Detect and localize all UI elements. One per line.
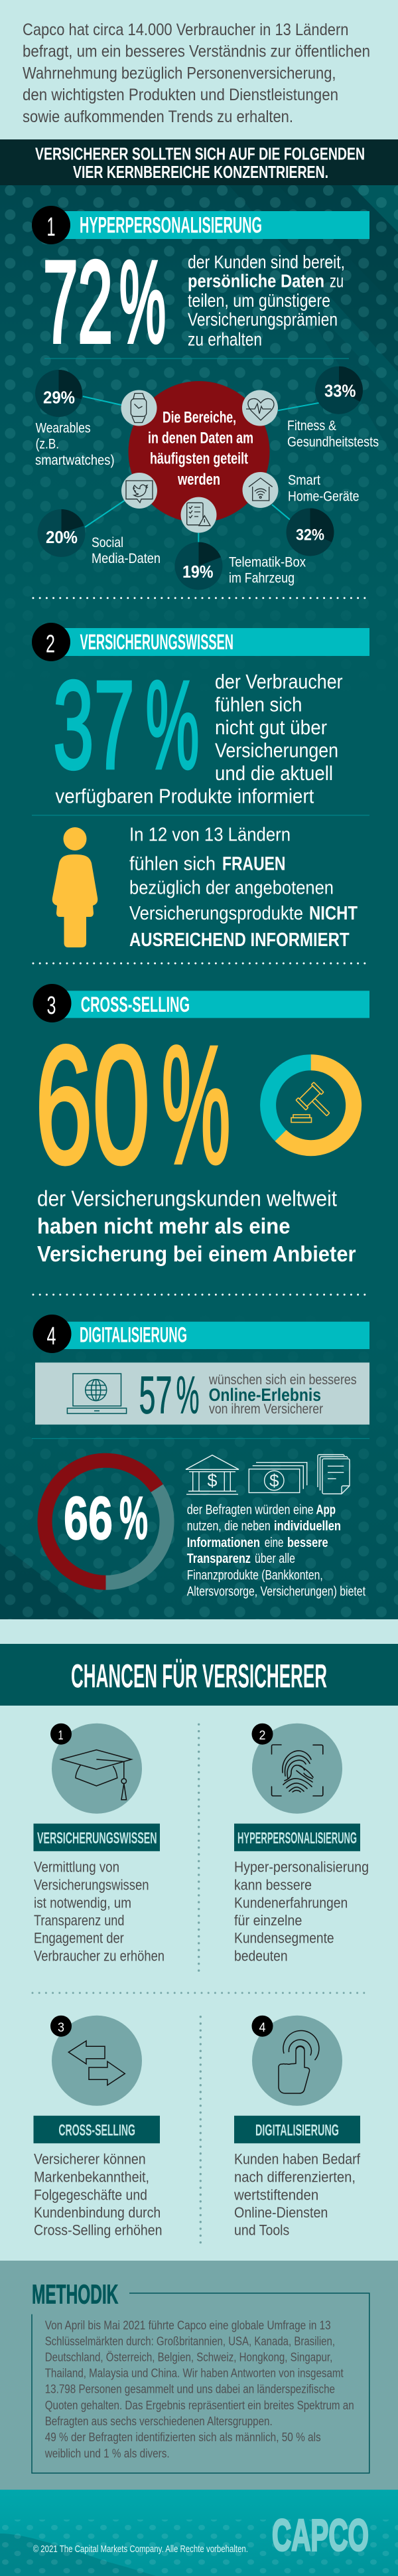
stat text: 37 percent: nicht gut über [215,716,327,739]
label: wearables [35,421,115,468]
ring chart: 66 percent: % [119,1485,148,1552]
text: women not sufficiently informed: fühlen sich [129,854,216,875]
icon: woman [52,827,98,947]
panel: opportunity 2: Kundensegmente [234,1930,334,1947]
label: smart home: Home-Geräte [288,489,360,505]
section 4 heading: DIGITALISIERUNG [80,1323,187,1346]
label: fitness [287,418,379,450]
central red circle [129,381,269,523]
stat text: 66 percent: individuellen [274,1518,341,1534]
panel: online experience 57 percent: von ihrem Versicherer [209,1402,323,1417]
stat text: 37 percent: fühlen sich [215,693,302,716]
section 2 heading: VERSICHERUNGSWISSEN [80,630,233,654]
panel: opportunity 1: VERSICHERUNGSWISSEN [37,1830,157,1848]
stat: 37 percent: 37 [53,655,135,795]
stat: 72 percent: 72 [43,238,113,367]
title: opportunities [0,1644,398,1706]
panel: opportunity 1 [33,1724,165,1965]
panel: opportunity 4: nach differenzierten, [234,2168,356,2185]
pie: telematics 19 percent: 19% [182,562,214,582]
text: women not sufficiently informed [129,825,358,951]
stat text: 72 percent: persönliche Daten [188,271,324,291]
section 1 heading: HYPERPERSONALISIERUNG [80,213,262,238]
stat text: 72 percent: zu erhalten [188,329,262,350]
section 3 heading: CROSS-SELLING [81,993,190,1016]
text: % [146,655,199,795]
label: wearables: smartwatches) [35,453,115,468]
stat text: 72 percent: zu [330,271,344,291]
panel: opportunity 3: Versicherer können [34,2150,146,2167]
stat text: 72 percent: Versicherungsprämien [188,309,338,330]
pie: smart home 32 percent [287,509,334,556]
icon: banknotes [249,1463,307,1492]
panel: online experience 57 percent: 57 [139,1365,172,1425]
stat text: 66 percent: nutzen, die neben [187,1518,271,1534]
panel: opportunity 3: 3 [58,2021,64,2035]
panel: methodology: Von April bis Mai 2021 führte Capco eine globale Umfrage in 13 [45,2318,331,2332]
icon: exchange arrows [68,2041,125,2085]
panel: methodology: Schlüsselmärkten durch: Großbritannien, USA, Kanada, Brasilien, [45,2334,335,2348]
section 4 heading: 4 [46,1323,56,1350]
stat text: 60 percent: Versicherung bei einem Anbieter [37,1242,356,1266]
text: women not sufficiently informed: bezüglich der angebotenen [129,878,334,899]
label: fitness: Gesundheitstests [287,435,379,450]
label: smart home: Smart [288,473,320,488]
pie: fitness 33 percent: 33% [324,381,356,401]
label: telematics: im Fahrzeug [229,571,295,586]
central red circle: Die Bereiche, [163,409,236,427]
stat text: 72 percent: teilen, um günstigere [188,290,330,311]
panel: opportunity 1: Verbraucher zu erhöhen [34,1948,165,1965]
panel: methodology [0,2261,398,2490]
panel: opportunity 4: Online-Diensten [234,2204,328,2221]
panel: opportunity 4: wertstiftenden [233,2186,318,2203]
panel: methodology: 13.798 Personen gesammelt und uns dabei an länderspezifische [45,2383,335,2396]
panel: opportunity 2: bedeuten [234,1948,288,1965]
stat text: 66 percent: eine [265,1535,284,1550]
section 1 heading: 1 [46,212,56,242]
panel: opportunity 1: 1 [58,1729,64,1743]
icon: documents [318,1455,350,1494]
pie: telematics 19 percent [175,542,223,590]
icon: smartwatch [121,390,157,426]
stat text: 37 percent: verfügbaren Produkte informiert [55,784,314,807]
panel: methodology: Thailand, Malaysia und China. Wir haben Antworten von insgesamt [45,2367,344,2380]
stat text: 66 percent: App [316,1502,336,1518]
label: telematics [229,554,306,586]
label: social media: Media-Daten [92,551,161,566]
panel: opportunity 3: CROSS-SELLING [58,2122,135,2140]
panel: methodology: Befragten aus sechs verschiedenen Altersgruppen. [45,2415,273,2428]
panel: opportunity 2: Hyper-personalisierung [234,1858,369,1875]
stat text: 66 percent [187,1502,365,1599]
central red circle: in denen Daten am [148,430,253,447]
panel: methodology: METHODIK [32,2279,119,2309]
ring chart: 66 percent: 66 [64,1485,113,1552]
icon: telematics checklist [180,497,216,533]
intro panel [0,0,398,139]
panel: online experience 57 percent: Online-Erlebnis [209,1385,321,1405]
panel: opportunity 3: Folgegeschäfte und [34,2186,147,2203]
headline band [0,139,398,185]
icon: bank [186,1455,239,1494]
label: fitness: Fitness & [287,418,336,434]
panel: online experience 57 percent [35,1362,369,1425]
pie: wearables 29 percent [35,370,82,417]
stat text: 37 percent [55,670,343,807]
panel: opportunity 1: Versicherungswissen [34,1876,149,1893]
panel: opportunity 4 [233,2016,361,2239]
icon: fingerprint [272,1745,323,1796]
panel: methodology: 49 % der Befragten identifizierten sich als männlich, 50 % als [45,2431,321,2444]
section 3 heading: 3 [46,992,56,1020]
pie: social media 20 percent [37,509,85,557]
icon: touch hand [279,2031,319,2093]
ring chart: 66 percent [45,1461,167,1583]
label: smart home [288,473,360,505]
pie: fitness 33 percent [315,366,363,414]
stat text: 66 percent: Informationen [187,1535,260,1550]
panel: opportunity 1: Transparenz und [34,1912,125,1929]
stat text: 37 percent: und die aktuell [215,762,333,785]
pie: wearables 29 percent: 29% [43,388,75,408]
icon: smart home [243,472,279,508]
stat text: 37 percent: der Verbraucher [215,670,343,693]
panel: opportunity 2 [234,1724,369,1965]
section 2 heading [32,623,369,661]
section 3 heading [33,984,369,1022]
icon: banknotes: $ [269,1471,279,1490]
main teal background [0,185,398,1619]
intro panel: Wahrnehmung bezüglich Personenversicherung, [23,64,336,82]
panel: opportunity 1: Engagement der [34,1930,124,1947]
text: women not sufficiently informed: Versicherungsprodukte [129,903,303,924]
donut chart with gavel [268,1062,354,1148]
stat: 60 percent: 60 [35,1012,150,1198]
text: women not sufficiently informed: NICHT [309,903,358,924]
intro panel: Capco hat circa 14.000 Verbraucher in 13 Ländern [23,21,349,39]
label: wearables: (z.B. [36,437,59,452]
panel: opportunity 4: und Tools [234,2222,289,2239]
panel: opportunity 3: Kundenbindung durch [34,2204,161,2221]
text: % [119,238,166,367]
panel: opportunity 3 [33,2016,162,2239]
section 2 heading: 2 [46,631,55,659]
text: women not sufficiently informed: In 12 von 13 Ländern [129,825,291,846]
icon: social media bubble [121,473,157,509]
panel: online experience 57 percent: wünschen sich ein besseres [208,1372,357,1388]
panel: opportunity 4: 4 [259,2021,266,2035]
pie: smart home 32 percent: 32% [296,526,324,544]
stat text: 72 percent [188,252,345,350]
panel: online experience 57 percent: % [176,1365,199,1425]
stat text: 37 percent: Versicherungen [215,739,338,762]
label: social media: Social [92,535,123,550]
panel: opportunity 4: Kunden haben Bedarf [234,2150,361,2167]
section 4 heading [33,1315,369,1353]
icon: heart pulse [242,390,278,426]
footer [0,2490,398,2576]
stat text: 60 percent: haben nicht mehr als eine [37,1214,291,1238]
stat text: 66 percent: der Befragten würden eine [187,1502,314,1518]
panel: opportunity 2: 2 [259,1729,265,1743]
stat text: 72 percent: der Kunden sind bereit, [188,252,345,272]
stat text: 66 percent: Finanzprodukte (Bankkonten, [187,1568,323,1583]
stat text: 66 percent: über alle [255,1551,295,1566]
panel: opportunity 3: Markenbekanntheit, [34,2168,149,2185]
panel: methodology: Deutschland, Österreich, Belgien, Schweiz, Hongkong, Singapur, [45,2351,332,2364]
intro panel: den wichtigsten Produkten und Dienstleistungen [23,86,338,104]
panel: opportunity 1: Vermittlung von [34,1858,119,1875]
panel: opportunity 3: Cross-Selling erhöhen [34,2222,162,2239]
connector lines [83,396,319,542]
intro panel: sowie aufkommenden Trends zu erhalten. [23,108,293,126]
stat text: 66 percent: bessere [287,1535,328,1550]
section 1 heading [32,206,369,244]
text: women not sufficiently informed: FRAUEN [222,854,285,875]
label: telematics: Telematik-Box [229,554,306,570]
label: social media [92,535,161,566]
central red circle: häufigsten geteilt [150,450,248,468]
icon: graduation cap [61,1750,131,1800]
panel: opportunity 2: Kundenerfahrungen [234,1894,348,1911]
panel: opportunity 2: für einzelne [234,1912,302,1929]
central red circle: werden [177,471,220,489]
label: wearables: Wearables [36,421,91,436]
pie: social media 20 percent: 20% [46,527,78,547]
text: % [162,1012,231,1198]
panel: light opportunities background [0,1619,398,2261]
panel: methodology: weiblich und 1 % als divers. [44,2447,170,2460]
panel: opportunity 4: DIGITALISIERUNG [255,2122,339,2140]
panel: opportunity 2: kann bessere [234,1876,312,1893]
stat text: 60 percent: der Versicherungskunden weltweit [37,1186,337,1211]
stat text: 66 percent: Transparenz [187,1551,251,1566]
icon: laptop with globe [67,1374,127,1413]
icon: bank: $ [207,1471,218,1490]
text: women not sufficiently informed: AUSREICHEND INFORMIERT [129,929,350,951]
footer: © 2021 The Capital Markets Company. Alle Rechte vorbehalten. [33,2543,248,2555]
stat text: 60 percent [37,1186,356,1266]
panel: opportunity 1: ist notwendig, um [34,1894,131,1911]
